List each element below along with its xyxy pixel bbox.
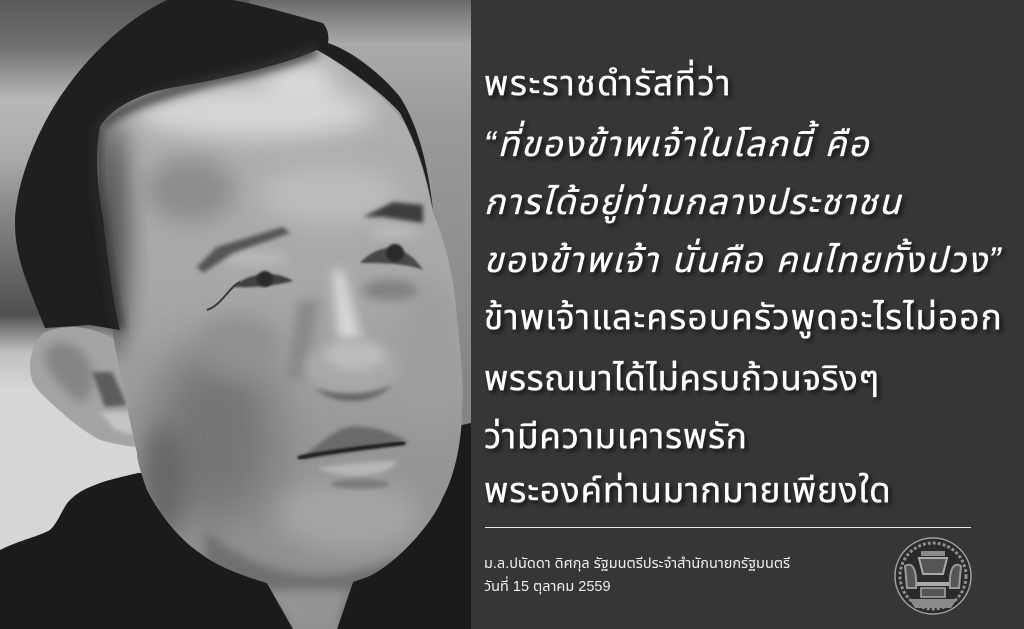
icon: government seal	[894, 537, 972, 615]
quote line 2: “ที่ของข้าพเจ้าในโลกนี้ คือ	[484, 125, 870, 164]
nose bridge	[332, 270, 362, 340]
quote line 1: พระราชดำรัสที่ว่า	[484, 64, 732, 103]
right cheek	[424, 302, 436, 308]
face	[90, 40, 470, 629]
nose side shadow	[285, 300, 320, 380]
quote line 6: พรรณนาได้ไม่ครบถ้วนจริงๆ	[484, 359, 880, 398]
quote line 5: ข้าพเจ้าและครอบครัวพูดอะไรไม่ออก	[484, 298, 1003, 337]
brow shading	[145, 158, 235, 222]
divider rule	[485, 527, 971, 528]
forehead highlight	[135, 86, 375, 138]
quote line 3: การได้อยู่ท่ามกลางประชาชน	[484, 183, 902, 222]
right eyebrow	[363, 202, 423, 223]
nose	[305, 340, 399, 401]
caption: date: วันที่ 15 ตุลาคม 2559	[484, 579, 611, 595]
hair	[15, 0, 433, 330]
caption: speaker name: ม.ล.ปนัดดา ดิศกุล รัฐมนตรีประจำสำนักนายกรัฐมนตรี	[484, 556, 790, 572]
ear	[30, 327, 140, 447]
left cheek shading	[153, 345, 277, 525]
temple shading	[94, 120, 130, 360]
shirt	[0, 423, 471, 629]
quote line 4: ของข้าพเจ้า นั่นคือ คนไทยทั้งปวง”	[484, 241, 1002, 280]
upper lid right	[376, 226, 415, 239]
right eye	[360, 244, 423, 270]
left eye	[207, 271, 293, 310]
chin	[280, 479, 420, 551]
panel: quote background	[471, 0, 1024, 629]
quote line 8: พระองค์ท่านมากมายเพียงใด	[484, 471, 892, 510]
photo: portrait of speaker	[0, 0, 471, 629]
upper lid left	[228, 250, 282, 266]
jaw crease	[205, 530, 405, 620]
neck	[262, 590, 350, 629]
left eyebrow	[197, 227, 290, 273]
quote line 7: ว่ามีความเคารพรัก	[484, 417, 748, 456]
under-eye shadow	[362, 280, 418, 300]
mouth	[297, 426, 410, 489]
